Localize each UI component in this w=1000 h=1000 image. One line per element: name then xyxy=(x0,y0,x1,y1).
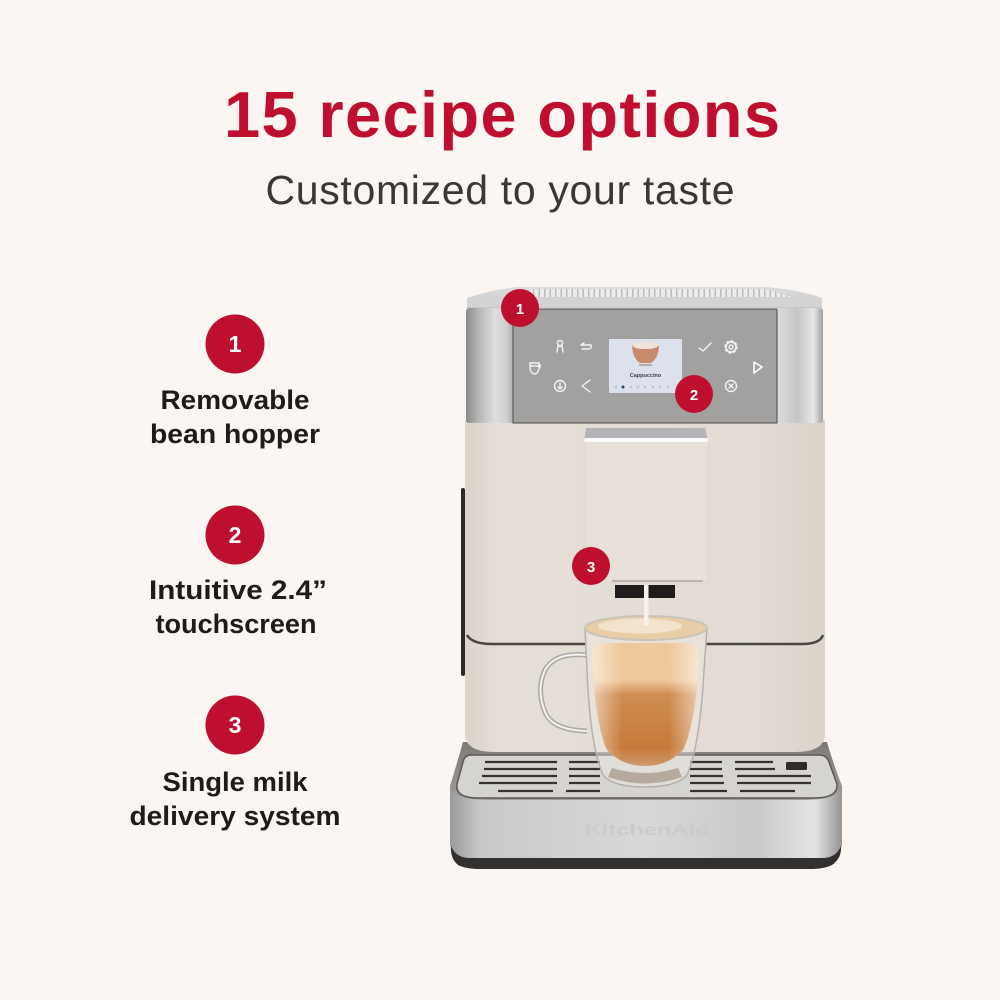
icon: chevron left xyxy=(582,380,590,392)
marker 3 on machine: 3 xyxy=(587,559,595,576)
icon: download dial xyxy=(554,380,566,392)
marker 1 on machine: 1 xyxy=(516,301,524,318)
coffee edge highlight xyxy=(592,643,699,766)
feature 1: removable bean hopper: Removable xyxy=(160,385,310,415)
icon: gear xyxy=(725,341,737,353)
foam xyxy=(585,616,707,640)
feature 2: intuitive touchscreen xyxy=(149,506,327,639)
feature 2: intuitive touchscreen: touchscreen xyxy=(156,609,316,639)
mug base xyxy=(608,768,682,784)
tray button xyxy=(786,762,807,770)
screen page dots xyxy=(615,386,669,388)
marker 3 on machine xyxy=(572,547,610,585)
feature 1: removable bean hopper: 1 xyxy=(229,331,242,357)
feature 3: single milk delivery system xyxy=(130,696,340,831)
left steel column xyxy=(466,308,514,423)
glass mug xyxy=(540,585,707,787)
icon: cancel xyxy=(726,380,736,392)
feature 3: single milk delivery system: Single milk xyxy=(162,767,308,797)
spout handle xyxy=(584,428,708,442)
title: 15 recipe options xyxy=(224,78,780,151)
dispenser nozzle xyxy=(615,585,675,598)
feature 1: removable bean hopper xyxy=(150,314,321,449)
coffee machine xyxy=(450,287,842,869)
icon: check xyxy=(699,343,711,351)
icon: return arrow xyxy=(581,343,591,349)
screen label: Cappuccino xyxy=(630,373,662,379)
drip tray front xyxy=(450,786,842,869)
feature 2: intuitive touchscreen: 2 xyxy=(229,522,241,548)
dispenser cover xyxy=(584,441,708,583)
top bean hopper lid xyxy=(467,287,822,308)
control panel xyxy=(513,309,777,423)
feature 3: single milk delivery system: 3 xyxy=(229,712,241,738)
milk stream xyxy=(644,585,648,625)
marker 2 on machine: 2 xyxy=(690,387,698,404)
drip tray grate xyxy=(450,742,842,802)
subtitle: Customized to your taste xyxy=(266,167,734,213)
feature 1: removable bean hopper: bean hopper xyxy=(150,419,321,449)
screen cup xyxy=(632,342,659,363)
mug handle xyxy=(540,655,587,731)
coffee xyxy=(592,643,699,766)
marker 2 on machine xyxy=(675,375,713,413)
marker 1 on machine xyxy=(501,289,539,327)
right steel column xyxy=(777,308,823,423)
feature 2: intuitive touchscreen: Intuitive 2.4” xyxy=(149,575,327,605)
body seam xyxy=(467,635,823,644)
icon: cup xyxy=(530,363,540,374)
touchscreen xyxy=(609,339,682,393)
brand mark: KitchenAid xyxy=(584,822,710,839)
feature list xyxy=(130,314,340,831)
water tank side edge xyxy=(461,488,465,676)
feature 3: single milk delivery system: delivery system xyxy=(130,801,340,831)
machine body xyxy=(465,420,825,752)
icon: play xyxy=(754,362,762,373)
mug glass xyxy=(585,628,707,787)
icon: person xyxy=(557,340,563,352)
touch icons xyxy=(530,340,762,392)
